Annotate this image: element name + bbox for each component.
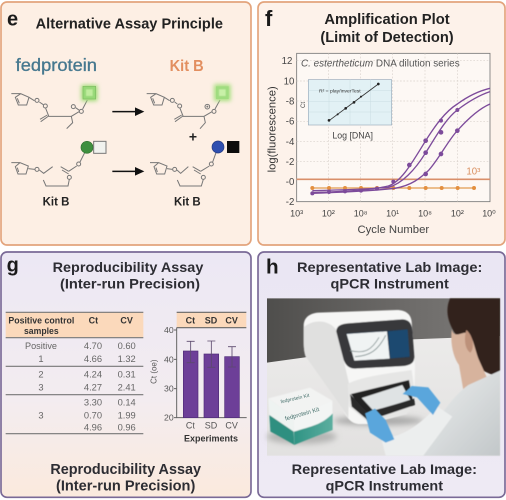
bar chart: experiments: Ct (ое): [150, 359, 159, 384]
y axis ticks and labels: 12: [282, 56, 292, 67]
y axis ticks and labels: -6: [286, 117, 294, 128]
heading: reproducibility assay: Reproducibility Assay: [53, 259, 204, 275]
bar chart: experiments: CV: [225, 316, 238, 326]
arrow: top reaction: [112, 107, 144, 116]
bar chart: experiments: Ct: [186, 316, 195, 326]
table: positive control samples: CV: [120, 315, 133, 325]
table: positive control samples: 3: [38, 410, 44, 420]
table: positive control samples: Ct: [89, 315, 98, 325]
threshold line: [297, 177, 490, 182]
heading: amplification plot: Amplification Plot: [324, 12, 450, 28]
heading: representative lab image: [297, 260, 482, 292]
arrow: bottom reaction: [112, 167, 144, 176]
y axis ticks and labels: -8: [286, 96, 294, 107]
table: positive control samples: 0.60: [118, 341, 136, 351]
y axis ticks and labels: -2: [286, 157, 294, 168]
table: positive control samples: 1.32: [118, 354, 136, 364]
x axis labels: 10³: [290, 208, 303, 218]
panel: e alternative assay principle: [1, 2, 251, 245]
table: positive control samples: 3: [38, 382, 44, 392]
inset standard curve: [301, 80, 392, 140]
table: positive control samples: Positive: [25, 341, 57, 351]
panel letter f: f: [265, 6, 273, 31]
heading: representative lab image: Representative Lab Image:: [297, 260, 482, 275]
table: positive control samples: 4.66: [84, 354, 102, 364]
heading: amplification plot: [320, 12, 454, 46]
table: positive control samples: samples: [24, 326, 59, 336]
heading: amplification plot: (Limit of Detection): [320, 30, 454, 46]
table: positive control samples: 4.96: [84, 423, 102, 433]
y axis ticks and labels: -4: [286, 137, 295, 148]
bar chart: experiments: SD: [205, 421, 218, 431]
x axis labels: [290, 208, 496, 218]
box label text: [280, 393, 320, 423]
table: positive control samples: 0.70: [84, 410, 102, 420]
table: positive control samples: 2.41: [118, 382, 136, 392]
caption: reproducibility assay: (Inter-run Precision): [56, 479, 196, 495]
y axis ticks and labels: -2: [286, 197, 294, 208]
molecule: bottom left with green circle and white square: [11, 141, 106, 186]
chart: amplification curves: [267, 53, 496, 236]
bar chart: experiments: Ct: [186, 421, 195, 431]
bar chart: experiments: 40: [164, 354, 174, 364]
caption: representative lab image: qPCR Instrument: [326, 479, 443, 494]
heading: alternative assay principle: Alternative Assay Principle: [36, 16, 223, 32]
panel: h representative lab image: [258, 252, 505, 497]
negative control orange series: [310, 186, 476, 190]
molecule: bottom right with blue circle and black square: [150, 141, 239, 186]
y axis ticks and labels: -0: [286, 177, 294, 188]
x axis labels: 10¹: [386, 208, 399, 218]
x axis labels: 10⁸: [354, 208, 368, 218]
heading: reproducibility assay: (Inter-run Precision): [60, 276, 200, 292]
panel letter e: e: [7, 8, 18, 30]
kit box: [267, 388, 337, 445]
caption: representative lab image: Representative Lab Image:: [292, 462, 477, 477]
threshold label: 10³: [466, 166, 481, 177]
table: positive control samples: 4.24: [84, 370, 102, 380]
bar chart: experiments: 20: [164, 413, 174, 423]
bar chart: experiments: 40: [164, 325, 174, 335]
box label text: fedprotein Kit: [285, 407, 320, 423]
panel: g reproducibility assay: [1, 252, 251, 497]
label: Kit B orange: Kit B: [170, 58, 204, 75]
inset standard curve: Ct: [301, 102, 307, 108]
caption: representative lab image: [292, 462, 477, 494]
table: positive control samples: 0.31: [118, 370, 136, 380]
table: positive control samples: 2: [38, 370, 44, 380]
box label text: fedprotein Kit: [280, 393, 311, 405]
instrument body: [304, 310, 423, 425]
table: positive control samples: 0.96: [118, 423, 136, 433]
y axis title: log(fluorescence): [267, 86, 279, 172]
molecule: top left with green fluorophore: [11, 85, 97, 129]
inset standard curve: Log [DNA]: [332, 130, 373, 140]
technician: [365, 298, 500, 456]
bar chart: experiments: Experiments: [184, 434, 238, 444]
label: Kit B right: Kit B: [174, 195, 201, 209]
bar chart: experiments: CV: [225, 421, 238, 431]
y axis ticks and labels: [282, 56, 295, 208]
heading: representative lab image: qPCR Instrument: [330, 277, 449, 292]
plus sign: +: [189, 128, 197, 144]
amplification curve series: [310, 88, 490, 195]
x axis labels: 10⁰: [482, 208, 496, 218]
table: positive control samples: 4.70: [84, 341, 102, 351]
x axis labels: 10²: [322, 208, 335, 218]
table: positive control samples: 3.30: [84, 398, 102, 408]
bar chart: experiments: [150, 312, 247, 444]
x axis labels: 10⁸: [418, 208, 432, 218]
table: positive control samples: Positive control: [8, 315, 74, 325]
caption: reproducibility assay: [50, 462, 201, 495]
panel: f amplification plot: [258, 2, 505, 245]
x axis title: Cycle Number: [357, 224, 430, 236]
table: positive control samples: 1: [38, 354, 44, 364]
chart subtitle: C. esterthe­ticum DNA dilution series: [301, 59, 460, 70]
table: positive control samples: 0.14: [118, 398, 136, 408]
table: positive control samples: [6, 312, 143, 434]
label: fedprotein: fedprotein: [16, 55, 97, 75]
inset standard curve: R² = play/inverTest: [319, 88, 361, 94]
label: Kit B left: Kit B: [43, 195, 69, 209]
table: positive control samples: 4.27: [84, 382, 102, 392]
photo: qPCR instrument with technician: [267, 298, 500, 456]
x axis labels: 10²: [451, 208, 464, 218]
molecule: top right with green fluorophore: [147, 84, 231, 129]
bar chart: experiments: 30: [164, 384, 174, 394]
caption: reproducibility assay: Reproducibility Assay: [50, 462, 201, 478]
table: positive control samples: 1.99: [118, 410, 136, 420]
bar chart: experiments: SD: [205, 316, 218, 326]
panel letter h: h: [266, 255, 279, 278]
panel letter g: g: [7, 254, 19, 276]
y axis ticks and labels: 10: [284, 76, 294, 87]
heading: reproducibility assay: [53, 259, 204, 292]
